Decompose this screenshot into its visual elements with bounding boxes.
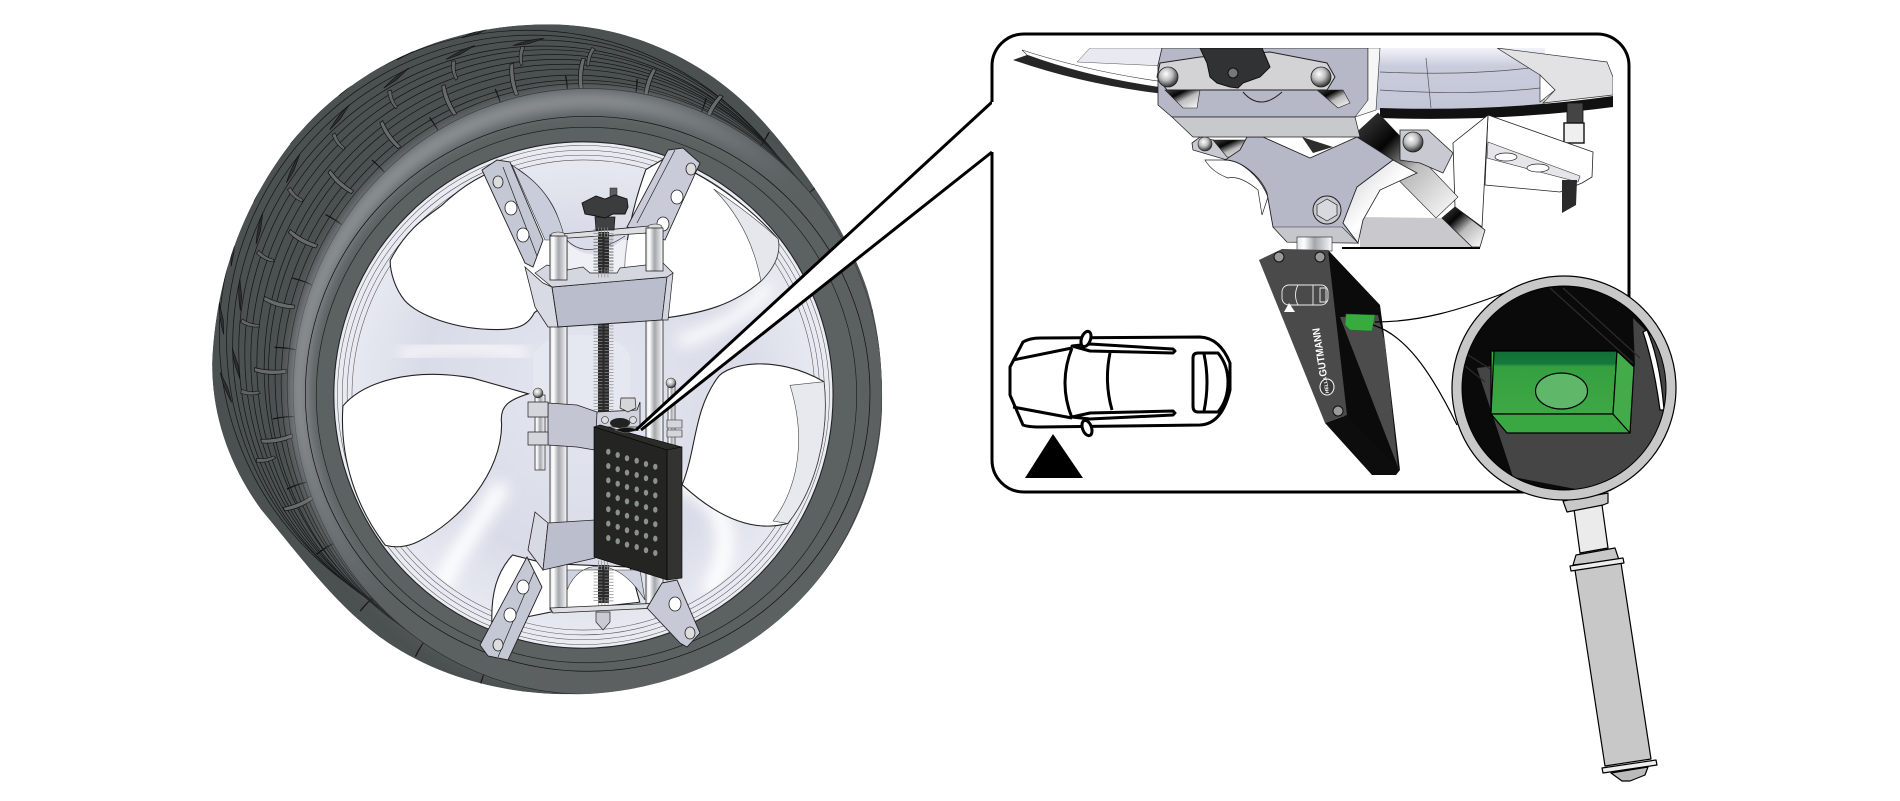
rim window: lower left xyxy=(342,374,528,547)
rim window: upper right xyxy=(624,159,779,317)
inset: lobes xyxy=(1192,130,1453,215)
holder car icon xyxy=(1282,285,1328,305)
rim hub shading xyxy=(512,165,646,600)
plate dots xyxy=(606,449,658,556)
inset: lower carrier xyxy=(1225,137,1417,243)
clamp: upper block xyxy=(525,228,673,327)
clamp: upper left arm xyxy=(482,160,543,267)
inset: level holder xyxy=(1259,249,1400,475)
rim xyxy=(334,142,833,648)
rim window: bottom xyxy=(492,555,640,624)
holder brand: GUTMANN xyxy=(1310,327,1330,377)
target plate xyxy=(594,425,682,580)
car icon xyxy=(1010,330,1230,437)
inset: right bracket xyxy=(1453,115,1593,227)
holder spirit level xyxy=(1345,314,1375,331)
inset: upper block xyxy=(1158,48,1380,137)
clamp: lower left arm xyxy=(480,557,542,660)
tyre sidewall xyxy=(293,88,882,694)
tyre tread xyxy=(212,24,892,694)
clamp: center bracket xyxy=(528,378,682,470)
clamp: threaded spindle and rods xyxy=(550,228,663,630)
magnifier handle xyxy=(1563,493,1657,781)
magnifier ring xyxy=(1452,276,1676,500)
leader lines to magnifier xyxy=(1373,292,1507,425)
inset: chrome shaft xyxy=(1297,237,1332,251)
wheel xyxy=(212,24,892,694)
clamp: upper crossbar and knob xyxy=(550,188,663,239)
rim window: upper left xyxy=(390,166,561,330)
inset: shelf xyxy=(1342,217,1480,248)
inset: long diagonal rod xyxy=(1354,113,1458,218)
inset: wheel rim and tyre strip xyxy=(1013,48,1613,119)
clamp: lower crossbar xyxy=(550,603,662,613)
inset: tilt bar xyxy=(1157,52,1335,90)
callout wedge xyxy=(636,102,992,430)
magnifier xyxy=(1450,276,1680,781)
holder screws xyxy=(1274,252,1343,416)
inset: rod end xyxy=(1442,207,1485,247)
inset: bolts xyxy=(1158,67,1331,87)
inset: spring stud xyxy=(1564,103,1584,143)
inset: short rods xyxy=(1165,90,1350,108)
tread blocks xyxy=(218,27,892,689)
panel: detail view xyxy=(992,34,1629,492)
inset: clamp close-up xyxy=(1013,48,1613,475)
triangle marker xyxy=(1025,434,1083,478)
inset: thread behind carrier xyxy=(1302,137,1333,153)
clamp: lower right arm xyxy=(647,580,700,647)
holder logo: HELLA xyxy=(1322,376,1331,394)
clamp: upper right arm xyxy=(627,148,700,240)
holder triangle xyxy=(1284,303,1295,312)
magnifier lens xyxy=(1462,286,1666,490)
holder logo xyxy=(1320,376,1334,395)
inset: knob xyxy=(1200,48,1282,102)
lens: green level xyxy=(1491,351,1634,433)
clamp: lower block xyxy=(528,512,595,570)
rim window: lower right xyxy=(682,364,825,526)
